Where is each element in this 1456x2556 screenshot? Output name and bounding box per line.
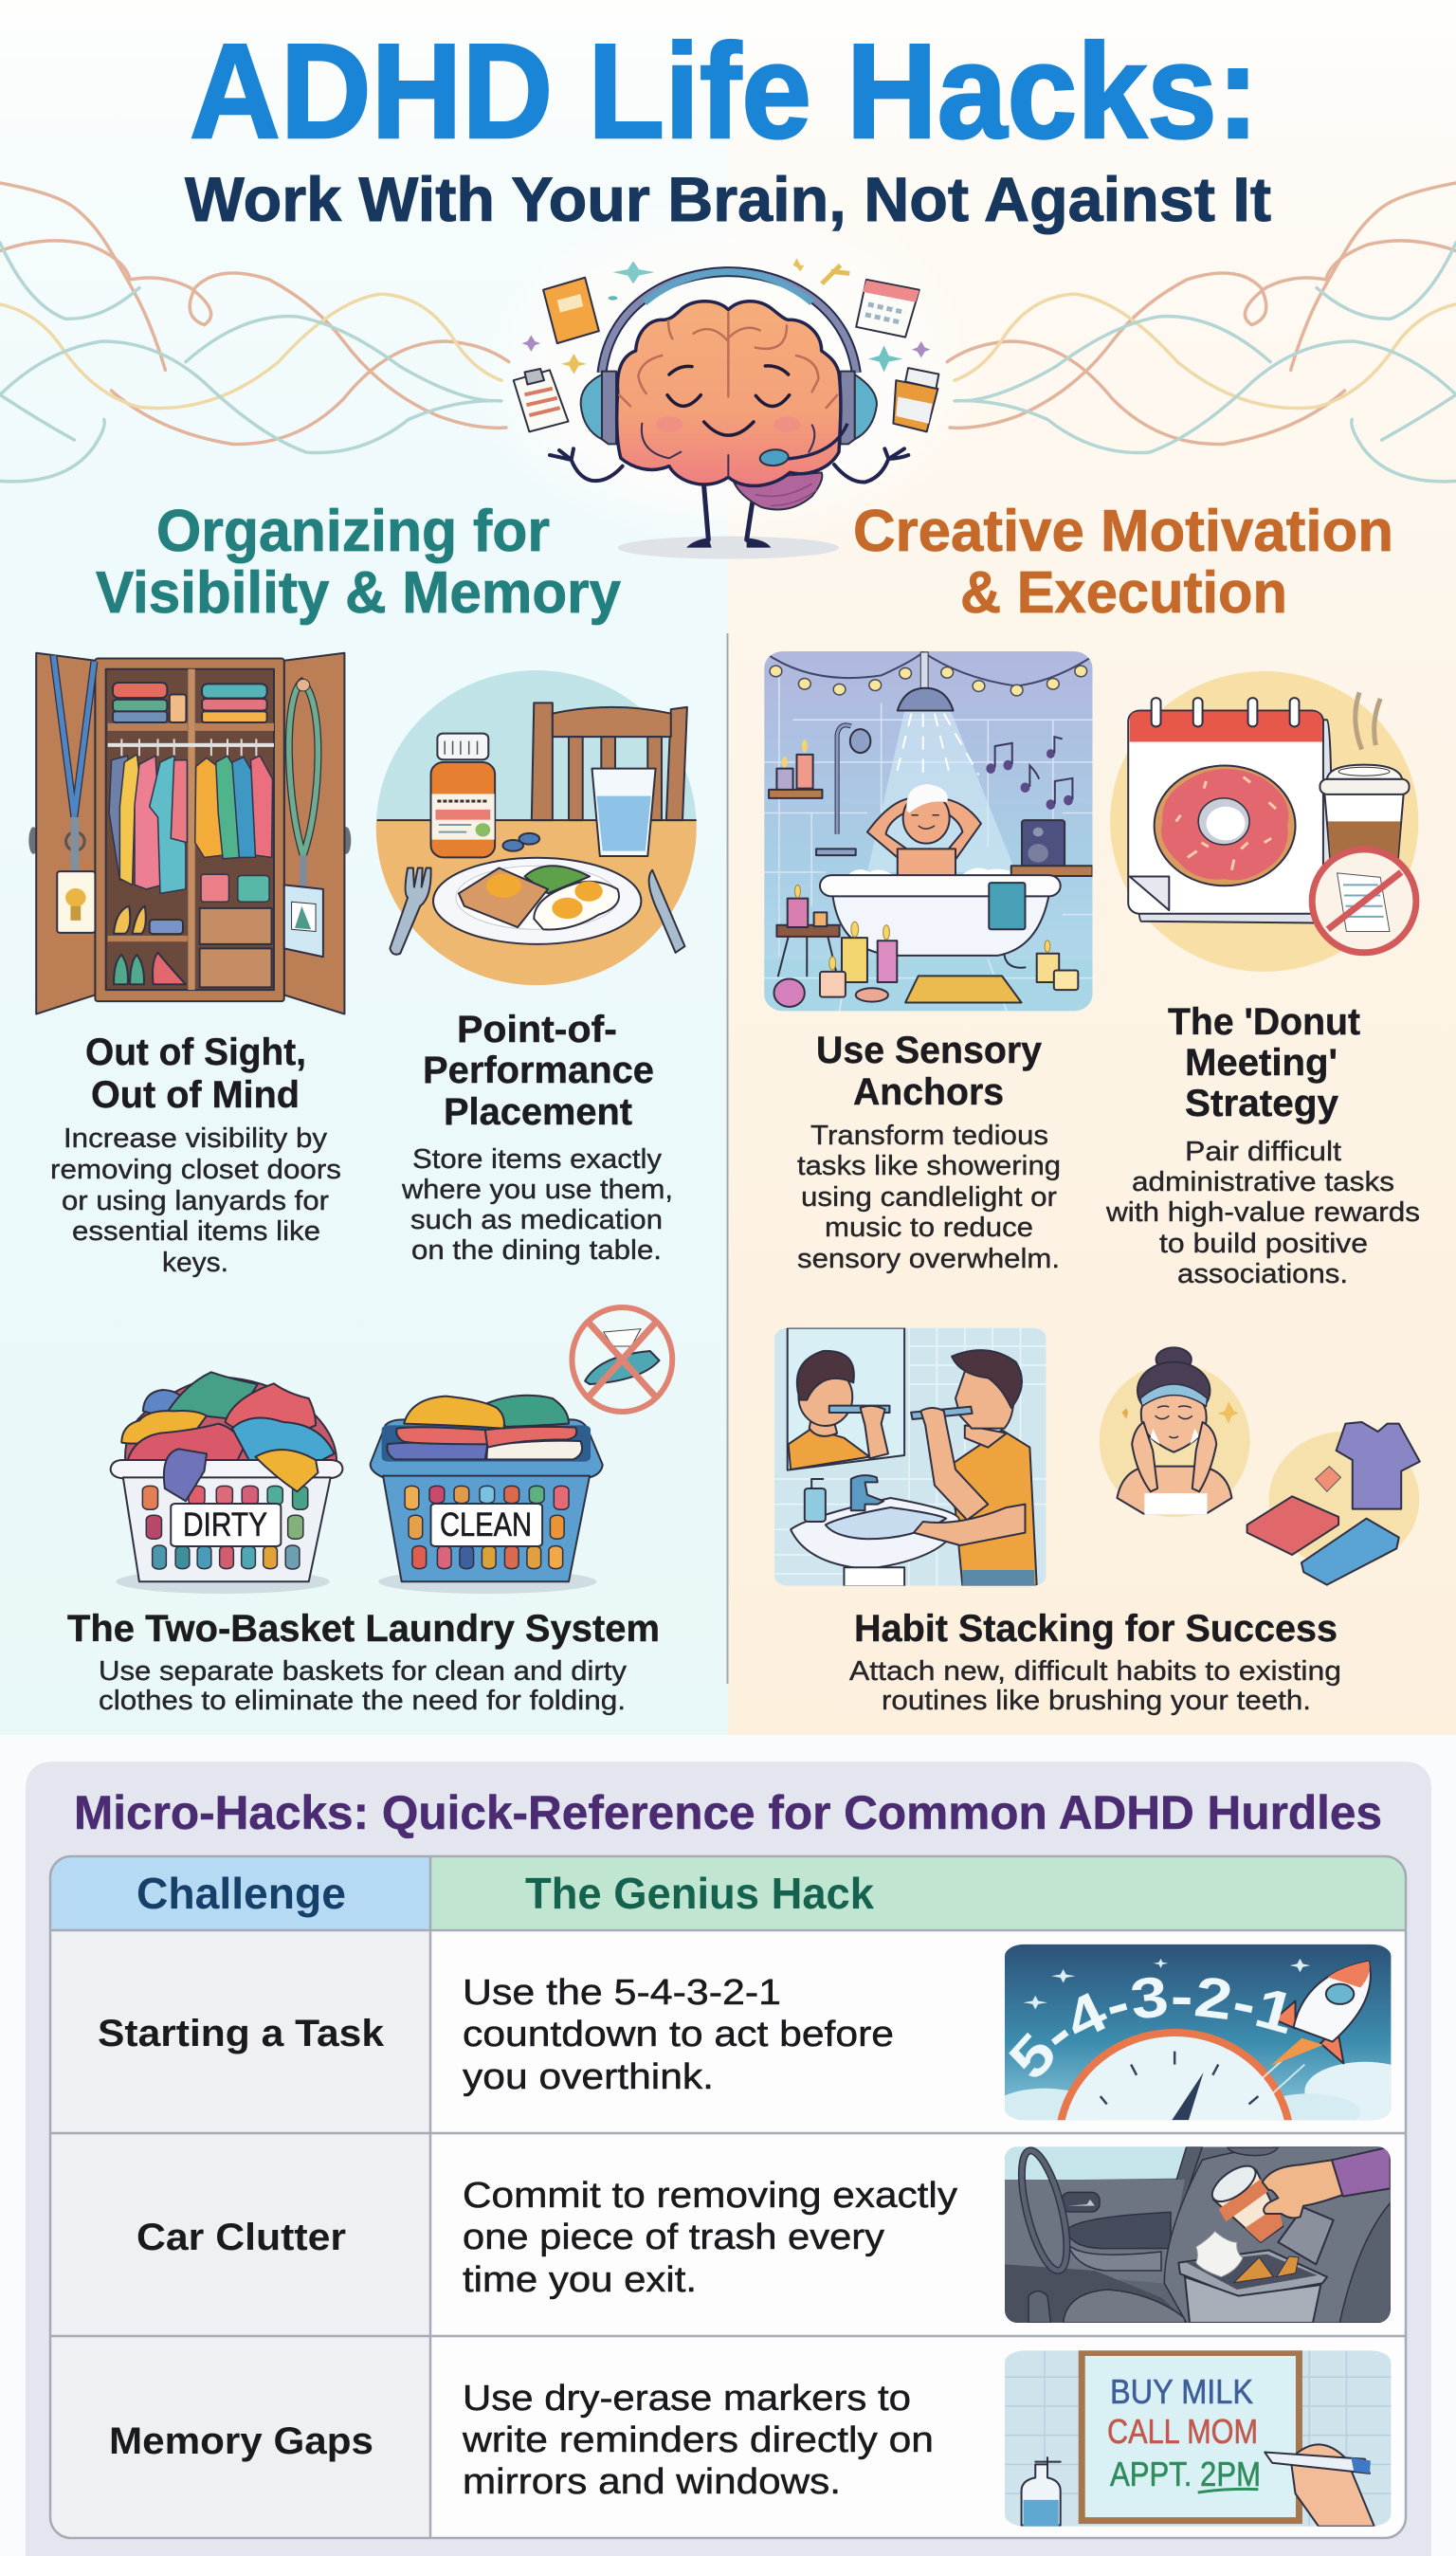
label: reminder text: APPT. 2PM: [1110, 2455, 1261, 2493]
row: starting a task: Use the 5-4-3-2-1: [463, 1973, 781, 2013]
table: [49, 1854, 1407, 2539]
body text: [99, 1656, 628, 1716]
body text: Attach new, difficult habits to existing: [849, 1656, 1341, 1687]
icon: dining table with medication: [372, 665, 701, 990]
icon: clean basket: [371, 1396, 603, 1594]
heading: Use Sensory: [816, 1030, 1043, 1071]
icon: countdown rocket: [1005, 1944, 1392, 2120]
heading: Placement: [444, 1091, 632, 1133]
heading: Meeting': [1185, 1042, 1338, 1084]
icon: mirror reminders: [1005, 2350, 1391, 2527]
panel: two-basket laundry: [67, 1307, 672, 1716]
section heading: creative motivation: & Execution: [960, 560, 1287, 626]
heading: Habit Stacking for Success: [854, 1608, 1338, 1650]
panel background: [26, 1762, 1431, 2556]
panel: habit stacking: [774, 1328, 1420, 1716]
row: starting a task: countdown to act before: [463, 2015, 894, 2054]
body text: where you use them,: [401, 1175, 673, 1205]
body text: or using lanyards for: [62, 1186, 329, 1216]
row: starting a task: Starting a Task: [98, 2013, 385, 2054]
icon: microphone: [759, 424, 847, 466]
floating icons: [514, 258, 938, 431]
title: ADHD Life Hacks:: [190, 16, 1259, 167]
row: starting a task: you overthink.: [463, 2057, 714, 2097]
row: car clutter: one piece of trash every: [463, 2218, 884, 2257]
heading: [85, 1032, 306, 1116]
body text: [1105, 1137, 1420, 1289]
heading: Out of Mind: [91, 1074, 300, 1116]
icon: woman washing face and clothes: [1100, 1347, 1420, 1585]
brain mascot with headphones and floating icons: [514, 258, 938, 559]
row: starting a task: [98, 1944, 1392, 2120]
icon: candlelit bathtub: [764, 651, 1092, 1011]
heading: Performance: [423, 1050, 654, 1091]
icon: donut on calendar with coffee: [1110, 671, 1418, 972]
section heading: creative motivation: [853, 499, 1393, 626]
body text: [797, 1121, 1061, 1274]
label: reminder text: CALL MOM: [1107, 2412, 1258, 2451]
panel: micro-hacks: [26, 1762, 1431, 2556]
icon: cerebellum: [733, 472, 822, 509]
table cells: [50, 1856, 1406, 2538]
body text: on the dining table.: [411, 1235, 662, 1266]
icon: dirty basket: [111, 1372, 342, 1594]
body text: essential items like: [72, 1216, 320, 1247]
body text: removing closet doors: [50, 1155, 341, 1185]
section heading: organizing: Visibility & Memory: [96, 560, 621, 626]
row: memory gaps: write reminders directly on: [462, 2420, 934, 2460]
body text: using candlelight or: [801, 1182, 1057, 1213]
icon: calendar: [856, 280, 919, 338]
icon: man brushing teeth: [774, 1328, 1046, 1586]
body text: administrative tasks: [1132, 1167, 1394, 1197]
panel: point of performance: [372, 665, 701, 1266]
icon: sparkles: [522, 258, 931, 374]
section heading: organizing: [96, 499, 621, 626]
row: car clutter: Car Clutter: [136, 2217, 346, 2258]
body text: clothes to eliminate the need for folding.: [99, 1686, 626, 1716]
icon: no folding sign: [572, 1307, 672, 1412]
label: reminder text: [1107, 2372, 1261, 2493]
icon: notebook: [543, 278, 599, 343]
body text: [50, 1123, 341, 1278]
icon: ground shadow: [618, 537, 839, 559]
body text: Use separate baskets for clean and dirty: [99, 1656, 628, 1687]
body text: [401, 1144, 673, 1266]
icon: ear cups: [581, 372, 877, 444]
body text: tasks like showering: [797, 1151, 1061, 1181]
row: memory gaps: Use dry-erase markers to: [463, 2379, 911, 2419]
heading: The Two-Basket Laundry System: [67, 1608, 660, 1650]
icon: wardrobe: [28, 653, 351, 1014]
heading: Anchors: [853, 1071, 1004, 1113]
body text: sensory overwhelm.: [797, 1244, 1060, 1274]
label: dirty: DIRTY: [183, 1506, 267, 1543]
row: car clutter: Commit to removing exactly: [463, 2176, 957, 2216]
icon: brain body: [617, 301, 841, 485]
icon: headphone band: [602, 272, 856, 373]
icon: pill bottle: [893, 368, 938, 431]
heading: [423, 1009, 654, 1133]
section heading: creative motivation: Creative Motivation: [853, 499, 1393, 564]
body text: such as medication: [410, 1205, 663, 1235]
body text: music to reduce: [825, 1213, 1033, 1243]
label: reminder text: BUY MILK: [1110, 2372, 1253, 2411]
column header: challenge: Challenge: [136, 1869, 346, 1918]
icon: car trash: [1005, 2146, 1391, 2323]
label: countdown numbers: 5-4-3-2-1: [1009, 1978, 1287, 2077]
section heading: organizing: Organizing for: [156, 499, 550, 564]
row: memory gaps: [109, 2350, 1391, 2527]
panel: out of sight: [28, 653, 351, 1278]
heading: Strategy: [1185, 1083, 1339, 1124]
icon: brain folds and face: [619, 313, 837, 477]
panel: sensory anchors: [764, 651, 1092, 1274]
heading: Point-of-: [457, 1009, 617, 1050]
icon: clipboard: [514, 369, 569, 431]
body text: associations.: [1177, 1259, 1348, 1289]
body text: routines like brushing your teeth.: [882, 1686, 1311, 1716]
body text: [849, 1656, 1341, 1716]
row: car clutter: [136, 2146, 1391, 2323]
body text: Increase visibility by: [64, 1123, 328, 1154]
panel: donut meeting: [1105, 671, 1420, 1289]
row: car clutter: time you exit.: [463, 2260, 697, 2300]
brain character: [550, 272, 908, 559]
body text: to build positive: [1159, 1229, 1368, 1259]
heading: The 'Donut: [1168, 1001, 1360, 1043]
background flowing waves: [0, 183, 1456, 482]
body text: Transform tedious: [810, 1121, 1048, 1151]
heading: [816, 1030, 1043, 1113]
column header: genius hack: The Genius Hack: [525, 1869, 874, 1918]
body text: Pair difficult: [1185, 1137, 1341, 1167]
body text: keys.: [162, 1248, 228, 1278]
label: clean: CLEAN: [440, 1506, 532, 1543]
row: memory gaps: Memory Gaps: [109, 2420, 373, 2462]
heading: Out of Sight,: [85, 1032, 306, 1073]
heading: micro-hacks: Micro-Hacks: Quick-Reference for Common ADHD Hurdles: [74, 1786, 1382, 1839]
row: memory gaps: mirrors and windows.: [463, 2462, 841, 2502]
subtitle: Work With Your Brain, Not Against It: [185, 164, 1271, 234]
icon: legs and feet: [686, 486, 771, 548]
icon: arms and hands: [550, 448, 908, 482]
heading: [1168, 1001, 1360, 1124]
body text: with high-value rewards: [1105, 1197, 1420, 1228]
body text: Store items exactly: [412, 1144, 663, 1175]
